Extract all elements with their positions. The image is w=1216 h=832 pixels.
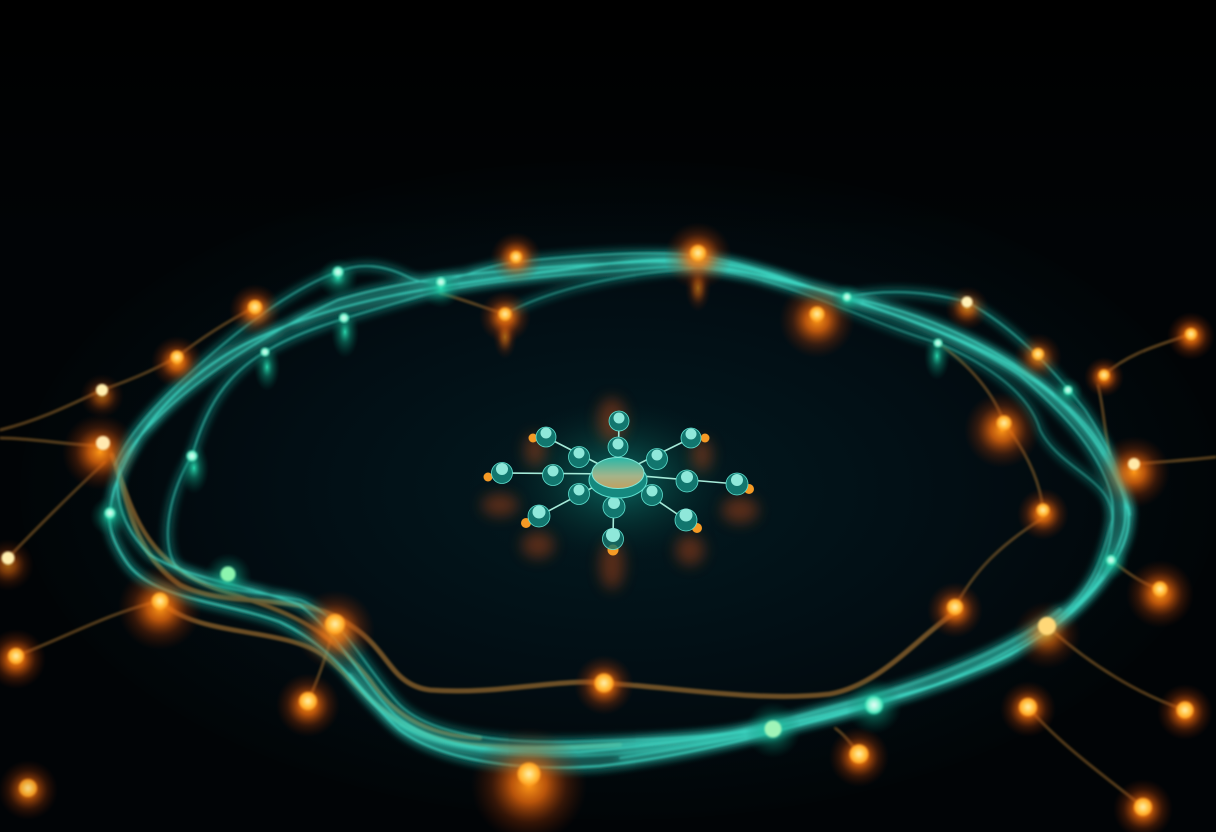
light: inner right [964,392,1040,468]
thin orange feeder wires [0,293,1216,807]
light: upper right orange [779,282,855,358]
light: far left yellow [0,539,34,591]
orange lights [0,222,1215,832]
light: bottom inner right [927,582,983,638]
light: far left low [0,629,46,689]
light: green lower left [204,553,252,601]
hub spokes [502,420,737,539]
light: teal top left [318,258,358,298]
light: large bottom [471,727,587,832]
light: teal inner left [254,343,280,391]
light: bottom left corner [0,760,58,820]
light: right [1014,333,1062,381]
light: teal inner right [924,332,950,380]
light: right top [945,286,989,330]
teal lights [90,258,1129,758]
light: teal right low [1093,544,1129,580]
olive inner wires [112,455,955,748]
light: lower left [276,673,340,737]
light: bottom [829,727,889,787]
light: upper left [229,284,281,336]
light: teal upper right [831,283,863,315]
light: upper left [151,336,203,388]
light: right lower [1126,560,1194,628]
light: teal bottom [846,678,902,734]
light: top centre orange [664,222,732,312]
hub orange tips [484,434,754,556]
light: top orange [490,232,542,284]
light: lower left on ring [295,590,375,670]
light: teal left [179,442,209,494]
hub centre disc [589,458,647,498]
hub outer and inner nodes [492,411,748,550]
light: teal right [1053,377,1083,407]
light: inner bottom [574,655,634,715]
light: far right top [1167,312,1215,360]
light: teal inner [331,306,359,358]
light: right mid [1098,436,1170,508]
light: left orange [62,414,138,490]
light: teal top [421,268,461,308]
light: right [1084,357,1124,397]
light: on ring lower right [1013,601,1081,669]
light: lower right [1000,681,1056,737]
central hub molecule [482,398,758,589]
hub glow and reflections [482,398,758,589]
light: bottom right corner [1113,779,1173,832]
teal ring wires [110,253,1130,768]
light: left on ring [118,566,202,650]
light: green bottom [745,702,801,758]
light: inner right lower [1017,488,1069,540]
light: upper inner orange [479,291,531,359]
light: far right low [1157,684,1213,740]
light: teal far left [90,496,130,536]
light: left yellow [80,374,124,418]
